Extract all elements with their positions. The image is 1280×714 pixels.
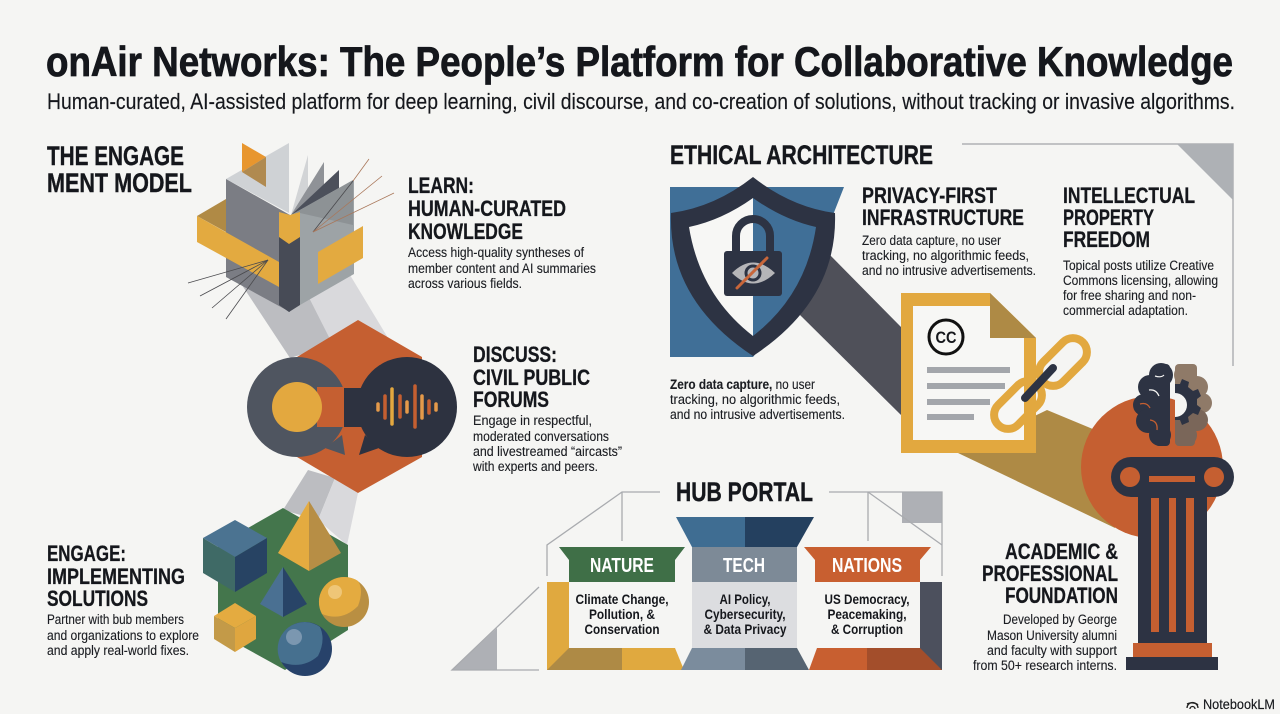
discuss text: DISCUSS:	[473, 342, 557, 367]
panel: tech	[676, 517, 814, 670]
academic foundation text: FOUNDATION	[1005, 583, 1118, 608]
panel: nature	[547, 547, 685, 670]
connector band: book to hexagon	[232, 270, 388, 358]
icon: shield with lock and crossed eye	[670, 177, 844, 357]
intellectual property text: Commons licensing, allowing	[1063, 273, 1218, 288]
intellectual property text: INTELLECTUAL	[1063, 183, 1195, 208]
discuss text: and livestreamed “aircasts”	[473, 444, 622, 459]
heading: the engagement model	[47, 141, 192, 198]
heading: the engagement model: MENT MODEL	[47, 168, 192, 198]
engage text: and organizations to explore	[47, 628, 199, 643]
panel: nature: Climate Change,	[576, 591, 668, 607]
connector band: shield to document	[800, 253, 901, 415]
intellectual property text: Topical posts utilize Creative	[1063, 258, 1214, 273]
discuss text: with experts and peers.	[472, 459, 598, 474]
small blue pyramid	[260, 567, 307, 617]
engage text: SOLUTIONS	[47, 586, 148, 611]
learn text: HUMAN-CURATED	[408, 196, 566, 221]
icon: chain links	[988, 332, 1093, 435]
academic foundation text: from 50+ research interns.	[973, 658, 1117, 673]
panel: nature: NATURE	[590, 555, 654, 577]
academic foundation text	[973, 539, 1118, 673]
heading: the engagement model: THE ENGAGE	[47, 141, 184, 171]
panel: tech: & Data Privacy	[704, 621, 787, 637]
icon: brain with gear	[1133, 363, 1212, 446]
connector band: document to column	[958, 410, 1115, 528]
hub portal heading: HUB PORTAL	[676, 477, 813, 507]
engage text: ENGAGE:	[47, 541, 126, 566]
panel: tech: AI Policy,	[720, 591, 770, 607]
icon: document with creative commons mark and chain	[901, 293, 1093, 453]
privacy-first text: and no intrusive advertisements.	[862, 263, 1036, 278]
engage text: and apply real-world fixes.	[47, 643, 189, 658]
learn text: Access high-quality syntheses of	[408, 245, 584, 260]
zero data capture callout: tracking, no algorithmic feeds,	[670, 392, 840, 407]
blue sphere	[278, 622, 332, 676]
yellow pyramid	[278, 501, 341, 571]
icon: audio waveform	[378, 386, 436, 427]
yellow sphere	[319, 577, 369, 627]
heading: ethical architecture: ETHICAL ARCHITECTURE	[670, 140, 933, 170]
icon: open book cube	[188, 143, 394, 319]
privacy-first text	[862, 183, 1036, 278]
discuss text	[472, 342, 622, 474]
engage text: Partner with bub members	[47, 612, 184, 627]
zero data capture callout: Zero data capture, no user	[670, 377, 815, 392]
learn text	[408, 173, 596, 291]
icon: green hexagon with geometric solids	[203, 501, 369, 676]
engage text	[47, 541, 199, 658]
panel: nature: Conservation	[584, 621, 660, 637]
icon: discussion hexagon with speech bubbles	[247, 320, 457, 493]
learn text: across various fields.	[408, 276, 522, 291]
panel: nations	[804, 547, 942, 670]
zero data capture callout: and no intrusive advertisements.	[670, 407, 845, 422]
blue cube	[203, 520, 267, 592]
intellectual property text: for free sharing and non-	[1063, 288, 1196, 303]
intellectual property text: PROPERTY	[1063, 205, 1154, 230]
learn text: LEARN:	[408, 173, 474, 198]
learn text: member content and AI summaries	[408, 261, 596, 276]
academic foundation text: Developed by George	[1003, 612, 1117, 627]
intellectual property text	[1063, 183, 1218, 318]
intellectual property text: commercial adaptation.	[1063, 303, 1188, 318]
orange circle behind column	[1081, 396, 1223, 538]
hub portal roof lines	[452, 492, 942, 670]
privacy-first text: INFRASTRUCTURE	[862, 205, 1024, 230]
panel: nations: NATIONS	[832, 555, 902, 577]
privacy-first text: PRIVACY-FIRST	[862, 183, 997, 208]
connector band: hexagon to solutions	[283, 470, 358, 545]
discuss text: Engage in respectful,	[473, 413, 592, 428]
panel: nations: & Corruption	[831, 621, 903, 637]
discuss text: CIVIL PUBLIC	[473, 365, 590, 390]
academic foundation text: ACADEMIC &	[1005, 539, 1118, 564]
panel: tech: Cybersecurity,	[704, 606, 786, 622]
corner frame top right	[962, 144, 1233, 366]
icon: document with creative commons mark and chain: CC	[936, 328, 956, 347]
panel: nations: US Democracy,	[824, 591, 910, 607]
intellectual property text: FREEDOM	[1063, 227, 1150, 252]
discuss text: moderated conversations	[473, 429, 609, 444]
engage text: IMPLEMENTING	[47, 564, 185, 589]
panel: tech: TECH	[723, 555, 765, 577]
panel: nature: Pollution, &	[589, 606, 655, 622]
zero data capture callout	[670, 377, 845, 422]
small yellow cube	[214, 603, 256, 652]
learn text: KNOWLEDGE	[408, 219, 523, 244]
academic foundation text: PROFESSIONAL	[982, 561, 1118, 586]
icon: classical column	[1111, 457, 1234, 670]
academic foundation text: and faculty with support	[987, 643, 1117, 658]
privacy-first text: tracking, no algorithmic feeds,	[862, 248, 1029, 263]
privacy-first text: Zero data capture, no user	[862, 233, 1001, 248]
panel: nations: Peacemaking,	[828, 606, 906, 622]
academic foundation text: Mason University alumni	[987, 628, 1117, 643]
discuss text: FORUMS	[473, 387, 549, 412]
